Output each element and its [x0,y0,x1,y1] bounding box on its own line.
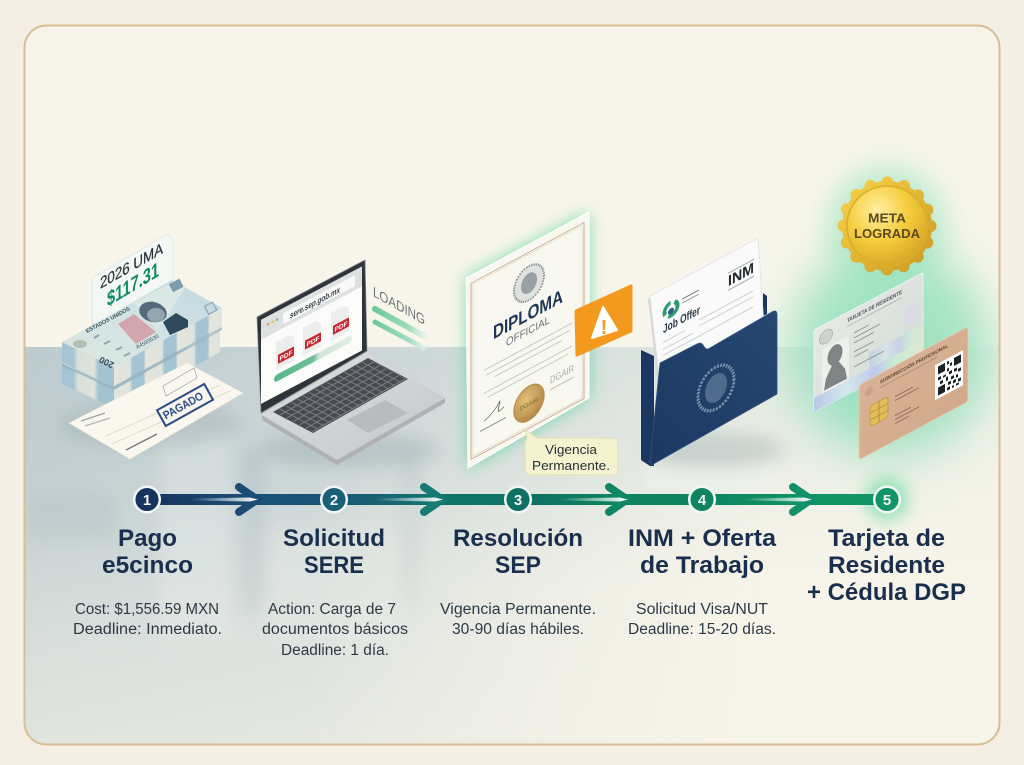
QR code [935,350,963,400]
folder front [650,311,777,464]
icon: gold medal META LOGRADA: META [868,210,907,226]
PDF files: PDF [335,321,347,334]
text block: step 3 Resolución SEP: Vigencia Permanente. [440,601,596,618]
label: 2026 UMA tag [92,234,173,324]
icon: professional ID card [859,326,968,460]
icon: official diploma: OFFICIAL [506,313,550,349]
icon: gold medal META LOGRADA: LOGRADA [854,226,921,241]
text block: step 3 Resolución SEP: Resolución [453,525,583,552]
PDF files [276,303,349,370]
text block: step 3 Resolución SEP: 30-90 días hábiles. [452,621,584,638]
text block: step 1 Pago e5cinco: Deadline: Inmediato. [73,621,222,638]
laptop screen [261,267,362,404]
icon: gold medal META LOGRADA [842,181,932,271]
bill stack: ESTADOS UNIDOS [85,306,132,335]
text block: step 5 Tarjeta de Residente + Cédula DGP: Tarjeta de [828,525,945,552]
text block: step 2 Solicitud SERE: Deadline: 1 día. [281,642,389,659]
step marker 3: 3 [514,492,522,509]
arrow 1 to 2 [150,487,335,512]
text block: step 2 Solicitud SERE: documentos básicos [262,621,408,638]
step marker 2 [321,487,347,512]
callout: Vigencia Permanente [525,430,618,475]
text block: step 4 INM + Oferta de Trabajo [628,525,777,638]
icon: orange warning tag: ! [601,317,607,339]
folder emblem [698,358,734,418]
arrow 4 to 5 [704,487,887,512]
text block: step 2 Solicitud SERE [262,525,408,659]
text block: step 4 INM + Oferta de Trabajo: Deadline: 15-20 días. [628,621,776,638]
panel: rounded card background [26,156,998,744]
step marker 4 [689,487,715,512]
job offer content: Job Offer [663,302,700,336]
bill stack: A4593530 [135,334,160,351]
text block: step 1 Pago e5cinco [73,525,222,638]
text block: step 3 Resolución SEP: SEP [495,552,541,579]
icon: orange warning tag [576,286,631,355]
text block: step 2 Solicitud SERE: Solicitud [283,525,385,552]
label: LOADING indicator: LOADING [373,284,425,329]
arrow 2 to 3 [336,487,520,512]
text block: step 1 Pago e5cinco: Pago [118,525,177,552]
text block: step 2 Solicitud SERE: Action: Carga de 7 [268,601,396,618]
icon: official diploma [466,212,589,468]
receipt with PAGADO stamp: PAGADO [161,390,206,422]
step marker 3 [505,487,531,512]
icon: blue folder with job offer [641,238,785,468]
callout: Vigencia Permanente: Vigencia [545,442,598,457]
job offer sheet [650,238,764,402]
icon: professional ID card: SUBDIRECCIÓN PROFESIONAL [880,341,949,386]
text block: step 4 INM + Oferta de Trabajo: Solicitud Visa/NUT [636,601,769,618]
text block: step 1 Pago e5cinco: Cost: $1,556.59 MXN [75,601,219,618]
chip [870,396,888,427]
text block: step 1 Pago e5cinco: e5cinco [102,552,193,579]
PDF files: PDF [280,350,292,363]
icon: residence card [814,272,923,412]
step marker 2: 2 [330,492,338,509]
label: 2026 UMA tag: $117.31 [107,256,159,312]
icon: residence card: TARJETA DE RESIDENTE [847,290,902,324]
text block: step 5 Tarjeta de Residente + Cédula DGP [807,525,966,606]
receipt with PAGADO stamp [69,363,243,459]
label: LOADING indicator [373,284,425,348]
label: 2026 UMA tag: 2026 UMA [100,238,163,293]
text block: step 4 INM + Oferta de Trabajo: INM + Oferta [628,525,777,552]
callout: Vigencia Permanente: Permanente. [532,458,610,473]
text block: step 5 Tarjeta de Residente + Cédula DGP: Residente [828,552,945,579]
step marker 4: 4 [698,492,707,509]
step marker 5 [874,487,900,512]
icon: laptop with SERE portal [257,260,445,468]
bill stack [62,279,222,411]
timeline with five numbered steps [134,477,909,521]
job offer content [663,258,754,355]
PDF files: PDF [307,335,319,349]
icon: cash stack with UMA tag and paid receipt [60,234,243,459]
step marker 1 [134,487,160,512]
icon: official diploma: DGAIR [550,362,574,387]
arrow 3 to 4 [520,487,703,512]
text block: step 5 Tarjeta de Residente + Cédula DGP: + Cédula DGP [807,579,966,606]
icon: official diploma: DGAIR [520,396,539,413]
step marker 5: 5 [883,492,891,509]
text block: step 4 INM + Oferta de Trabajo: de Trabajo [640,552,764,579]
text block: step 3 Resolución SEP [440,525,596,638]
laptop screen: sere.sep.gob.mx [290,284,341,320]
icon: official diploma: DIPLOMA [493,286,563,344]
job offer content: INM [728,259,754,290]
text block: step 2 Solicitud SERE: SERE [304,552,364,579]
step marker 1: 1 [143,492,151,509]
bill stack: 200 [98,354,116,370]
